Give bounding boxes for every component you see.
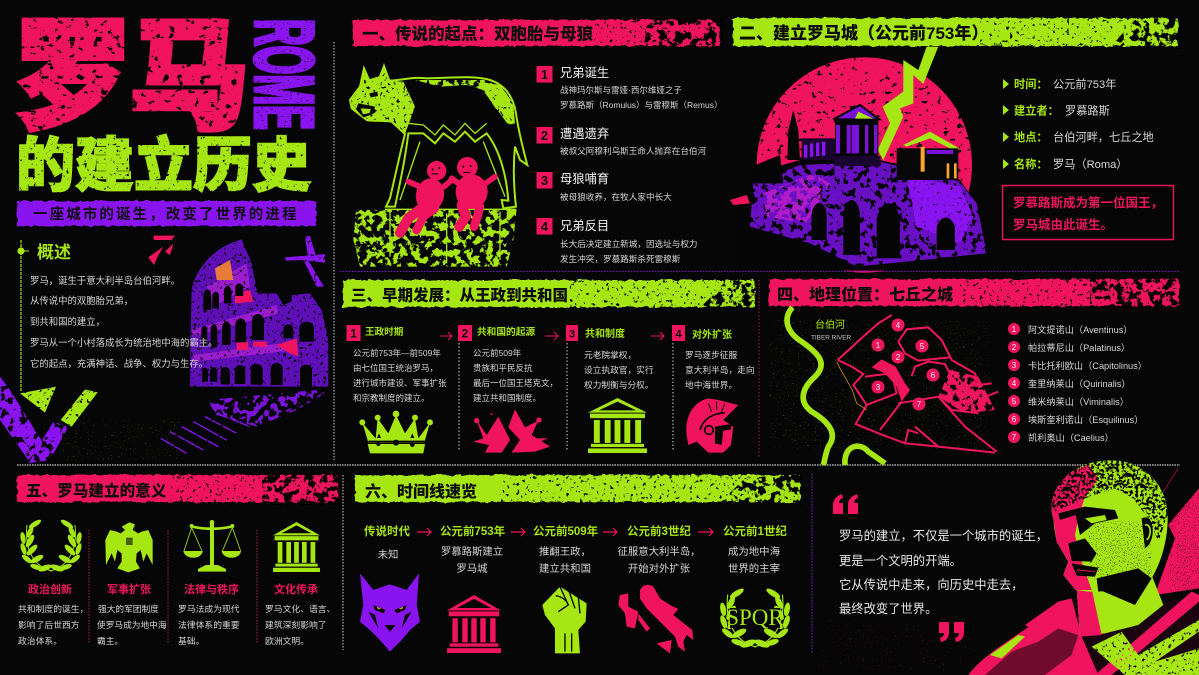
column separators: [89, 530, 257, 644]
facial shadows: [1058, 507, 1118, 535]
hill legend: 6: [1012, 415, 1017, 424]
callout: first king: 罗马城由此诞生。: [1013, 217, 1113, 232]
overview text: 它的起点，充满神话、战争、权力与生存。: [30, 358, 208, 369]
hill markers: 5: [920, 342, 925, 351]
overview text: [30, 275, 218, 369]
twins: [400, 157, 495, 233]
hill legend: 埃斯奎利诺山（Esquilinus）: [1028, 414, 1143, 425]
banner 4: [769, 276, 1180, 308]
hill markers: 3: [876, 383, 881, 392]
hill legend: 凯利奥山（Caelius）: [1028, 432, 1114, 443]
icon: eagle: [105, 522, 153, 572]
step 3: [536, 171, 672, 202]
phase 2: origin of the republic: [458, 325, 558, 403]
timeline column: 509 BC: 建立共和国: [539, 562, 591, 575]
vertical word ROME: ROME: [238, 19, 330, 130]
story steps: [536, 66, 722, 264]
founding facts: [1003, 77, 1154, 171]
fact: time: [1003, 77, 1116, 91]
phase 3: republican system: 共和制度: [585, 327, 625, 340]
callout: first king: [1002, 186, 1174, 240]
Tiber river: [787, 307, 885, 465]
quote text: 它从传说中走来，向历史中走去，: [839, 577, 1023, 592]
quote text: 更是一个文明的开端。: [839, 553, 962, 568]
hill markers: 4: [896, 321, 901, 330]
opening quote mark: [833, 494, 858, 514]
hill legend: 3: [1012, 361, 1017, 370]
fact: founder: 罗慕路斯: [1065, 104, 1110, 118]
hill legend: 阿文提诺山（Aventinus）: [1028, 324, 1132, 335]
illustration: she-wolf and twins: [350, 66, 527, 267]
river label: [811, 318, 852, 342]
timeline column: 509 BC: 推翻王政，: [539, 545, 591, 558]
column: political innovation: 政治创新: [28, 582, 72, 596]
overview timeline marker: [17, 240, 29, 392]
hair texture: [1052, 460, 1168, 542]
hill legend: 卡比托利欧山（Capitolinus）: [1028, 360, 1147, 371]
panel 6: timeline: [355, 472, 802, 653]
panel 2: founding of Rome: [730, 15, 1182, 273]
column: military expansion: [97, 522, 167, 646]
hill legend: [1008, 323, 1147, 443]
hill legend: 1: [1012, 325, 1017, 334]
column: political innovation: 共和制度的诞生，: [18, 603, 88, 614]
hill markers: 2: [896, 353, 901, 362]
phase 1: monarchy: 王政时期: [365, 326, 403, 338]
fact: place: 台伯河畔，七丘之地: [1053, 130, 1154, 144]
column: law and order: [178, 520, 241, 646]
step 2: 被叔父阿穆利乌斯王命人抛弃在台伯河: [560, 145, 707, 156]
banner 1: 一、传说的起点：双胞胎与母狼: [362, 24, 594, 44]
timeline column: 509 BC: [533, 524, 599, 653]
icon: temple (pink): [447, 595, 501, 653]
step 4: 兄弟反目: [560, 219, 609, 233]
main title: 罗马: 罗马: [13, 10, 249, 144]
phase 1: monarchy: 和宗教制度的建立。: [353, 393, 430, 403]
phase 2: origin of the republic: 建立共和国制度。: [473, 393, 541, 403]
phase 1: monarchy: 由七位国王统治罗马，: [353, 363, 438, 373]
map of the seven hills: [787, 307, 998, 465]
banner 3: 三、早期发展：从王政到共和国: [351, 286, 568, 304]
column: military expansion: 使罗马成为地中海: [97, 619, 167, 630]
illustration: statue of Augustus: [968, 460, 1199, 675]
hill markers: 7: [917, 400, 922, 409]
column: political innovation: [18, 518, 88, 646]
hill legend: 4: [1012, 379, 1017, 388]
column: cultural heritage: 建筑深刻影响了: [265, 619, 327, 630]
hill markers: 6: [931, 371, 936, 380]
hill legend: 5: [1012, 397, 1017, 406]
column: political innovation: 影响了后世西方: [18, 619, 80, 630]
timeline column: 1st century BC: 成为地中海: [728, 545, 780, 558]
decorative shards, bottom left: [0, 236, 175, 463]
phase separators: [459, 343, 673, 450]
step 1: 1: [541, 67, 548, 82]
icon: crown: [359, 411, 433, 453]
hill markers: 1: [876, 341, 881, 350]
timeline column: legend era: 传说时代: [364, 524, 410, 538]
icon: temple (green): [588, 398, 647, 453]
column: law and order: 法律体系的重要: [178, 619, 240, 630]
phase 1: monarchy: 1: [350, 326, 357, 340]
icon: SPQR wreath: SPQR: [726, 605, 784, 630]
column: military expansion: 强大的军团制度: [98, 603, 159, 614]
phase 3: republican system: [566, 325, 654, 390]
phase 2: origin of the republic: 共和国的起源: [477, 325, 535, 338]
step 4: [536, 218, 698, 264]
step 2: 2: [541, 128, 548, 143]
timeline column: 3rd century BC: [617, 524, 701, 653]
phase 4: expansion: 地中海世界。: [685, 379, 737, 390]
column: cultural heritage: 欧洲文明。: [265, 635, 309, 646]
closing quote mark: [939, 622, 964, 642]
hill legend: 维米纳莱山（Viminalis）: [1028, 396, 1129, 407]
column: law and order: 法律与秩序: [184, 582, 239, 596]
fact: name: 罗马（Roma）: [1053, 158, 1128, 171]
step 1: 罗慕路斯（Romulus）与雷穆斯（Remus）: [560, 100, 722, 110]
banner 4: 四、地理位置：七丘之城: [777, 285, 953, 304]
banner 1: [353, 18, 723, 48]
icon: broken crown: [473, 409, 550, 453]
step 4: 4: [541, 219, 549, 234]
overview text: 从传说中的双胞胎兄弟，: [30, 295, 133, 306]
phase 4: expansion: 4: [675, 328, 682, 340]
banner 6: 六、时间线速览: [365, 482, 477, 501]
banner 5: [17, 472, 340, 505]
toga sash: [1095, 592, 1199, 675]
timeline column: 1st century BC: 公元前1世纪: [723, 524, 787, 538]
dust speckles: [60, 320, 990, 670]
panel 3: early development: [343, 277, 758, 453]
phase 1: monarchy: 进行城市建设、军事扩张: [353, 378, 447, 388]
quote text: 最终改变了世界。: [839, 601, 937, 616]
timeline column: 3rd century BC: 开始对外扩张: [628, 562, 691, 575]
column: political innovation: 政治体系。: [18, 635, 62, 646]
panel 5: significance: [17, 472, 340, 646]
timeline column: 3rd century BC: 征服意大利半岛，: [617, 545, 701, 558]
column: military expansion: 霸主。: [97, 635, 123, 646]
panel 1: legend of the twins: [350, 18, 723, 267]
step 1: [536, 66, 722, 110]
phase 2: origin of the republic: 最后一位国王塔克文，: [473, 378, 558, 388]
phase 3: republican system: 元老院掌权，: [584, 349, 636, 360]
phase 1: monarchy: [346, 325, 447, 403]
icon: wolf head: [360, 573, 420, 652]
hill legend: 帕拉蒂尼山（Palatinus）: [1028, 342, 1130, 353]
river label: 台伯河: [815, 318, 845, 331]
panel: overview: [17, 240, 218, 392]
timeline column: 753 BC: 公元前753年: [440, 524, 506, 538]
column: cultural heritage: [265, 522, 335, 646]
column: law and order: 罗马法成为现代: [178, 603, 240, 614]
river label: TIBER RIVER: [811, 334, 852, 342]
timeline column: 1st century BC: 世界的主宰: [728, 562, 780, 575]
quote text: [839, 528, 1048, 616]
timeline column: 753 BC: [440, 524, 506, 653]
banner 3: [343, 277, 758, 310]
step 3: 母狼哺育: [560, 171, 609, 186]
icon: raised fist: [542, 587, 587, 653]
step 1: 兄弟诞生: [560, 66, 609, 80]
fact: name: 名称：: [1014, 157, 1048, 171]
tagline bar: [17, 201, 316, 226]
icon: laurel wreath: [19, 518, 83, 573]
overview text: 到共和国的建立，: [30, 316, 105, 327]
overview heading: 概述: [37, 243, 71, 262]
hill legend: 7: [1012, 433, 1017, 442]
phase 4: expansion: [672, 325, 754, 390]
column: law and order: 基础。: [178, 635, 204, 646]
timeline column: legend era: [360, 524, 420, 652]
timeline column: 3rd century BC: 公元前3世纪: [627, 524, 691, 538]
phase 4: expansion: 对外扩张: [692, 328, 732, 341]
phase arrows: [440, 332, 664, 340]
overview text: 罗马从一个小村落成长为统治地中海的霸主。: [30, 337, 218, 348]
neck: [1077, 575, 1163, 637]
timeline column: 509 BC: 公元前509年: [533, 524, 599, 538]
step 1: 战神玛尔斯与雷娅·西尔维娅之子: [560, 85, 682, 95]
quote text: 罗马的建立，不仅是一个城市的诞生，: [839, 528, 1048, 543]
fact: founder: 建立者：: [1014, 104, 1059, 118]
illustration: colosseum: [161, 236, 328, 453]
fact: time: 时间：: [1014, 77, 1048, 91]
timeline column: 1st century BC: [719, 524, 791, 649]
banner 5: 五、罗马建立的意义: [26, 481, 167, 500]
icon: scales: [183, 520, 241, 572]
column: military expansion: 军事扩张: [107, 582, 151, 596]
timeline column: 753 BC: 罗慕路斯建立: [441, 545, 503, 558]
city outline: [837, 315, 998, 453]
icon: map of Italy: [618, 585, 693, 653]
banner 2: [733, 15, 1182, 49]
hill markers: [872, 318, 940, 410]
fact: time: 公元前753年: [1053, 77, 1116, 91]
phase 4: expansion: 意大利半岛，走向: [685, 364, 754, 375]
phase 2: origin of the republic: 贵族和平民反抗: [473, 363, 533, 373]
phase 3: republican system: 设立执政官，实行: [584, 364, 654, 375]
step 2: [536, 126, 707, 156]
banner 6: [355, 472, 802, 505]
timeline column: 753 BC: 罗马城: [456, 563, 488, 575]
fact: place: 地点：: [1014, 130, 1048, 144]
callout: first king: 罗慕路斯成为第一位国王，: [1013, 195, 1163, 210]
phase 3: republican system: 3: [569, 328, 575, 340]
timeline arrows: [417, 528, 713, 536]
panel 4: seven hills: [769, 276, 1180, 465]
column: cultural heritage: 文化传承: [274, 582, 318, 596]
step 3: 3: [541, 173, 548, 188]
timeline column: legend era: 未知: [378, 548, 398, 561]
overview text: 罗马，诞生于意大利半岛台伯河畔。: [30, 275, 180, 286]
icon: legionary helmet: [686, 398, 738, 453]
banner 2: 二、建立罗马城（公元前753年）: [739, 23, 988, 43]
horizontal divider between rows: [340, 270, 1180, 272]
step 3: 被母狼收养，在牧人家中长大: [560, 191, 672, 202]
subtitle: 的建立历史: 的建立历史: [16, 133, 311, 199]
illustration: hill city with sun and lightning: [730, 47, 993, 273]
step 2: 遭遇遗弃: [560, 126, 609, 141]
phase 3: republican system: 权力制衡与分权。: [584, 379, 654, 390]
head: [1051, 460, 1168, 592]
fact: place: [1003, 130, 1154, 144]
step 4: 长大后决定建立新城，因选址与权力: [560, 238, 698, 249]
phase 1: monarchy: 公元前753年—前509年: [353, 348, 441, 358]
fact: name: [1003, 157, 1128, 171]
closing quote: [833, 494, 1048, 642]
hill legend: 奎里纳莱山（Quirinalis）: [1028, 378, 1131, 389]
hill legend: 2: [1012, 343, 1017, 352]
icon: temple (small): [273, 522, 320, 572]
phase 2: origin of the republic: 2: [462, 326, 469, 340]
fact: founder: [1003, 104, 1110, 118]
phase 4: expansion: 罗马逐步征服: [685, 350, 737, 360]
tagline bar: 一座城市的诞生，改变了世界的进程: [33, 205, 299, 223]
step 4: 发生冲突，罗慕路斯杀死雷穆斯: [560, 253, 681, 264]
phase 2: origin of the republic: 公元前509年: [473, 348, 522, 358]
column: cultural heritage: 罗马文化、语言、: [265, 603, 335, 614]
